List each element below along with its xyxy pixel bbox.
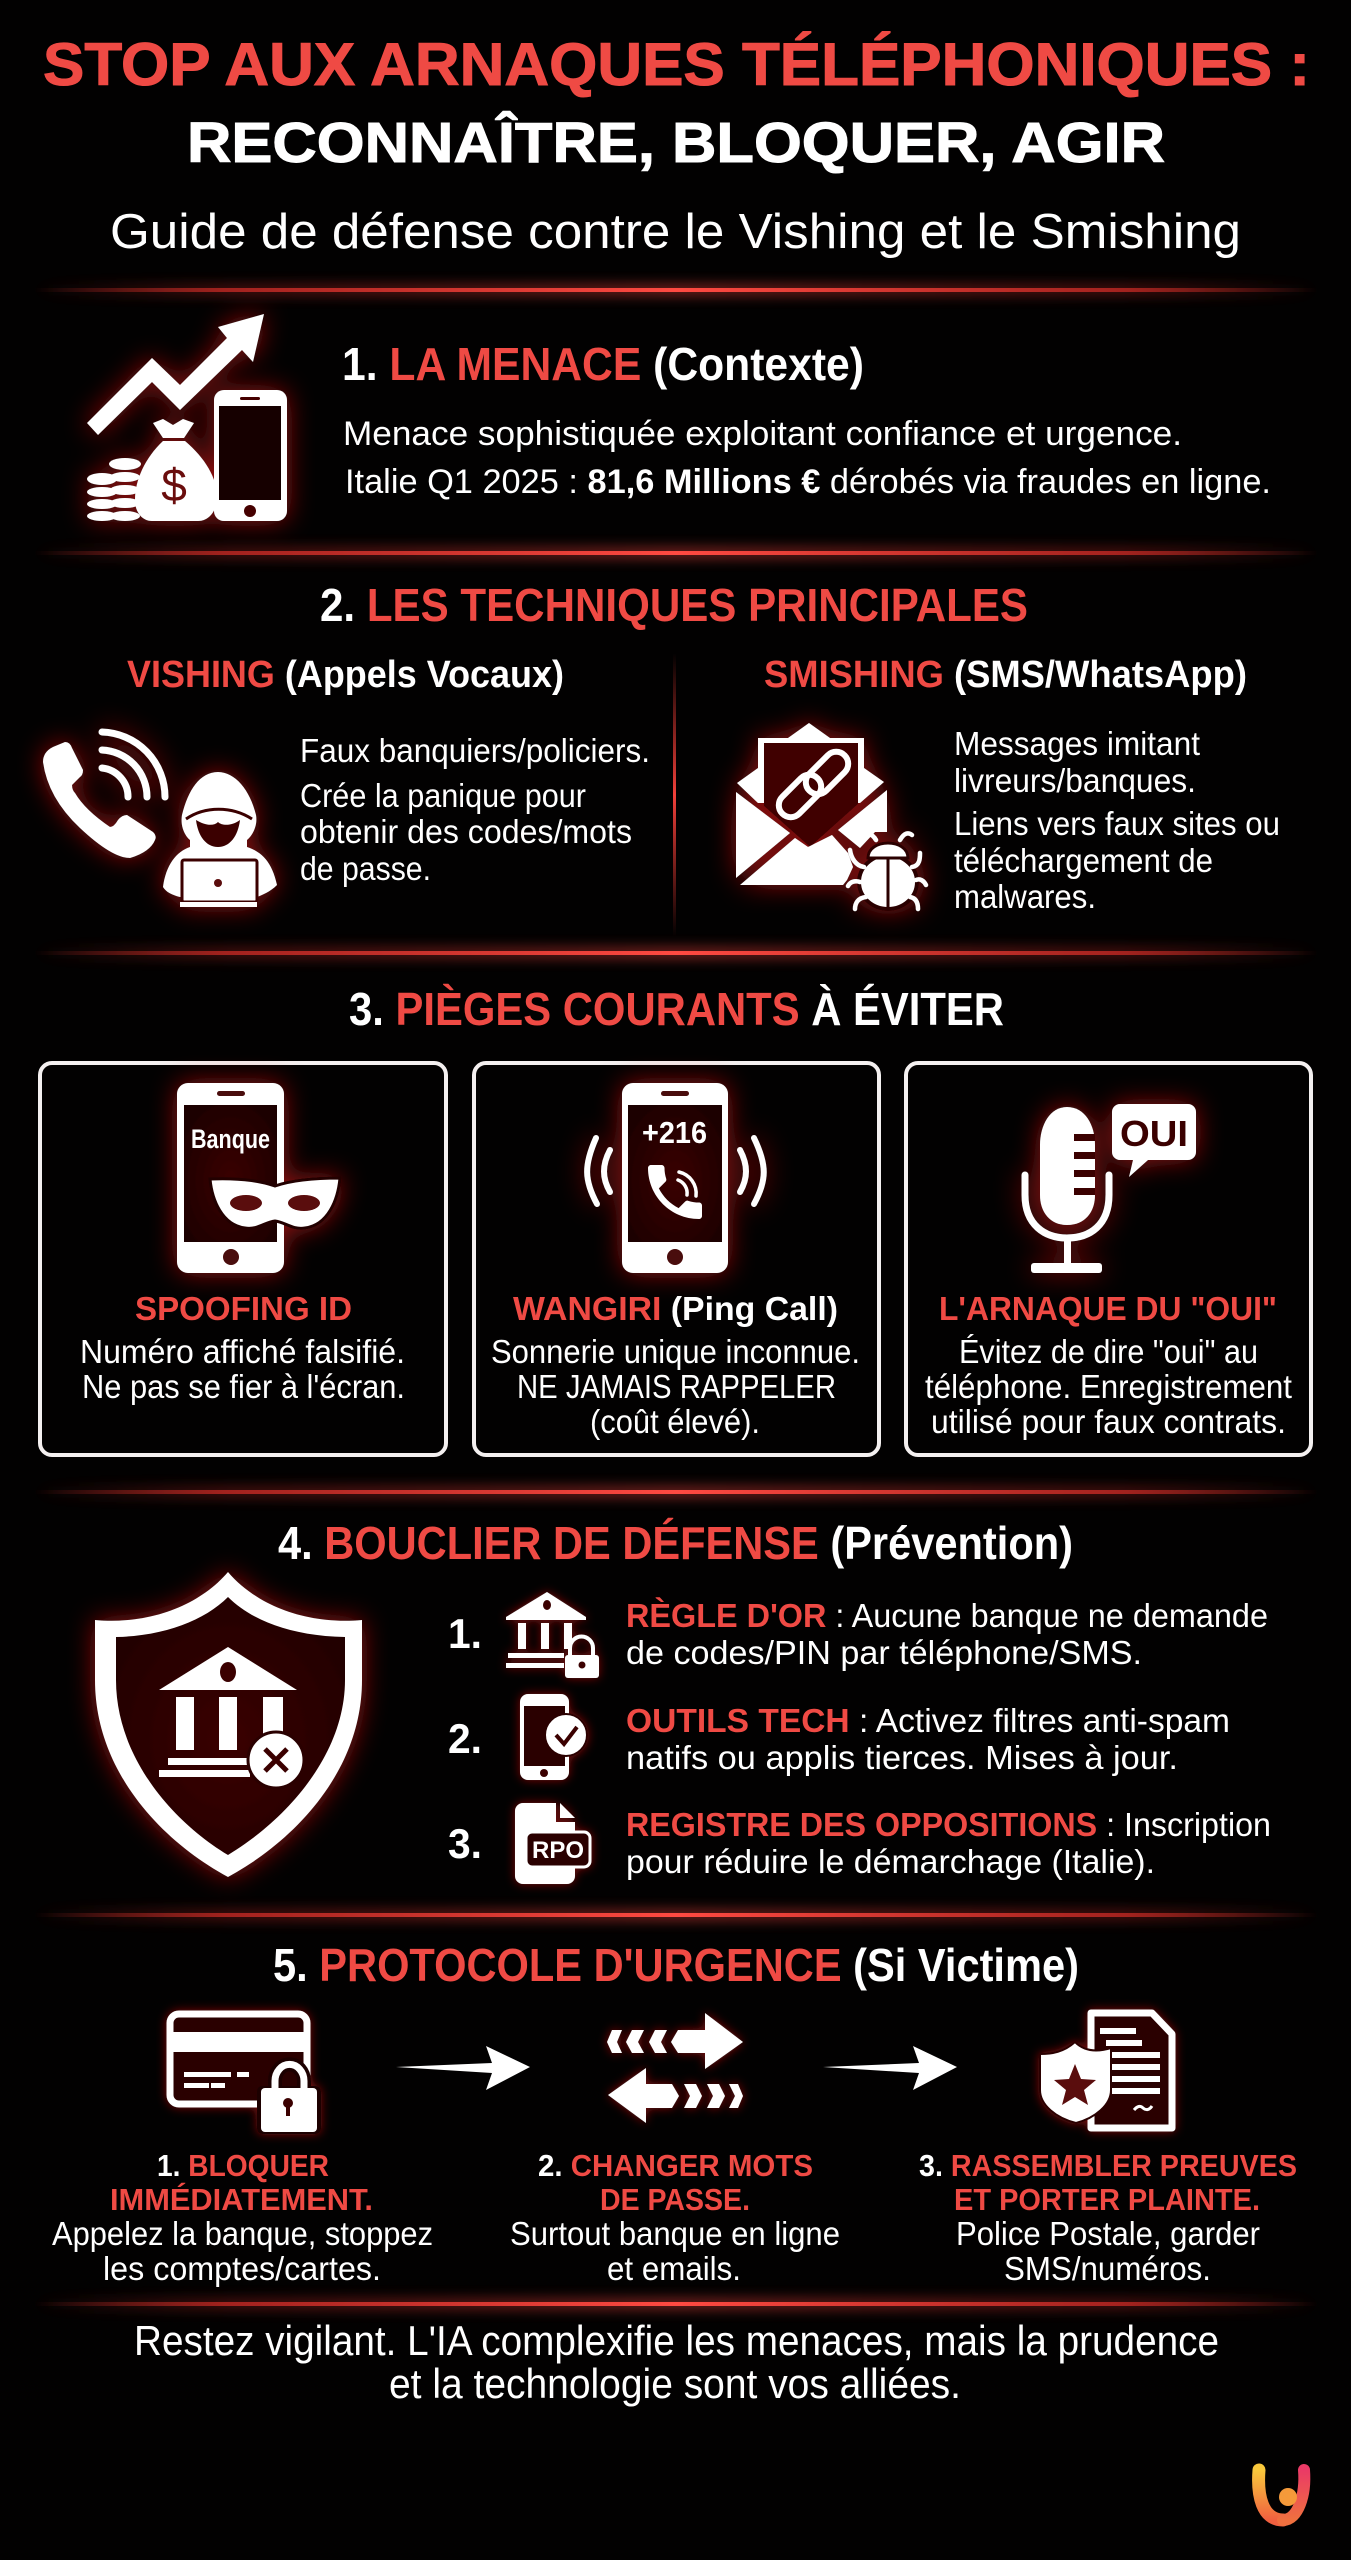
text: règle d'or: RÈGLE D'OR : Aucune banque ne demande <box>626 1597 1268 1634</box>
text: registre: pour réduire le démarchage (Italie). <box>626 1843 1155 1880</box>
icon: microphone with bubble: OUI <box>1120 1113 1188 1154</box>
step 3 text <box>919 2148 1297 2287</box>
arrow: step 2 to 3 <box>823 2046 957 2090</box>
step 1 text: les comptes/cartes. <box>103 2250 381 2287</box>
icon: RPO document: RPO <box>532 1837 584 1864</box>
icon: phone with mask <box>177 1083 340 1273</box>
title: spoofing: SPOOFING ID <box>135 1290 352 1327</box>
text: wangiri: Sonnerie unique inconnue. <box>491 1333 860 1370</box>
panel: techniques <box>43 579 1280 937</box>
text: la menace: Italie Q1 2025 : 81,6 Millions € dérobés via fraudes en ligne. <box>345 463 1271 501</box>
step 2 text: DE PASSE. <box>600 2182 750 2217</box>
text: wangiri <box>491 1333 860 1440</box>
icon: envelope with link and bug <box>736 723 926 909</box>
title: RECONNAÎTRE, BLOQUER, AGIR <box>187 110 1165 175</box>
icon: ringing phone: +216 <box>642 1115 707 1150</box>
text: arnaque du oui: téléphone. Enregistrement <box>925 1368 1292 1405</box>
footer message: et la technologie sont vos alliées. <box>389 2360 961 2407</box>
card: arnaque du oui <box>906 1063 1311 1455</box>
text: la menace <box>343 415 1271 501</box>
icon: bank with lock <box>506 1592 599 1678</box>
step 2 text: et emails. <box>607 2250 741 2287</box>
panel: la menace <box>87 314 1271 521</box>
text: la menace: Menace sophistiquée exploitant confiance et urgence. <box>343 415 1182 453</box>
text: smishing: téléchargement de <box>954 842 1213 879</box>
panel: protocole d'urgence <box>52 1939 1297 2287</box>
list item: registre des oppositions: 3. <box>448 1820 482 1867</box>
heading: protocole: 5. PROTOCOLE D'URGENCE (Si Victime) <box>273 1939 1079 1991</box>
text: registre <box>626 1806 1271 1880</box>
panel: pièges courants <box>40 983 1311 1455</box>
text: smishing <box>954 725 1280 915</box>
text: wangiri: (coût élevé). <box>590 1403 760 1440</box>
text: spoofing: Ne pas se fier à l'écran. <box>82 1368 405 1405</box>
icon: change passwords arrows <box>607 2013 743 2123</box>
title: STOP AUX ARNAQUES TÉLÉPHONIQUES : <box>43 31 1310 98</box>
step 3 text: SMS/numéros. <box>1004 2250 1211 2287</box>
text: smishing: malwares. <box>954 878 1096 915</box>
logo <box>1259 2470 1304 2520</box>
list item: règle d'or: 1. <box>448 1610 482 1657</box>
icon: phone and hacker <box>43 732 277 907</box>
text: vishing: Faux banquiers/policiers. <box>300 732 650 769</box>
subheading: vishing: VISHING (Appels Vocaux) <box>127 654 564 696</box>
step 3 text: 3. RASSEMBLER PREUVES <box>919 2148 1297 2183</box>
text: arnaque du oui: utilisé pour faux contrats. <box>931 1403 1286 1440</box>
text: smishing: livreurs/banques. <box>954 762 1196 799</box>
subheading: smishing: SMISHING (SMS/WhatsApp) <box>764 654 1247 696</box>
icon: ringing phone <box>587 1083 764 1273</box>
footer message <box>134 2317 1219 2407</box>
list item: règle d'or <box>448 1592 1268 1678</box>
heading: bouclier: 4. BOUCLIER DE DÉFENSE (Prévention) <box>278 1517 1073 1569</box>
text: vishing: Crée la panique pour <box>300 777 586 814</box>
text: outils tech <box>626 1702 1230 1776</box>
title: wangiri: WANGIRI (Ping Call) <box>513 1290 838 1327</box>
icon: card with lock <box>170 2014 321 2134</box>
step 1 text <box>52 2148 433 2287</box>
text: règle d'or <box>626 1597 1268 1671</box>
icon: money trend and phone <box>87 314 287 521</box>
subtitle: Guide de défense contre le Vishing et le Smishing <box>110 205 1241 259</box>
icon: phone with check <box>520 1694 587 1780</box>
step 1 text: Appelez la banque, stoppez <box>52 2215 433 2252</box>
icon: shield with bank <box>95 1572 362 1877</box>
text: vishing: obtenir des codes/mots <box>300 813 632 850</box>
step 3 text: Police Postale, garder <box>956 2215 1260 2252</box>
footer message: Restez vigilant. L'IA complexifie les menaces, mais la prudence <box>134 2317 1219 2364</box>
text: wangiri: NE JAMAIS RAPPELER <box>517 1368 836 1405</box>
icon: money trend and phone: $ <box>161 459 187 511</box>
arrow: step 1 to 2 <box>396 2046 530 2090</box>
step 2 text: 2. CHANGER MOTS <box>538 2148 813 2183</box>
list item: outils tech <box>448 1694 1230 1780</box>
panel: bouclier de défense <box>95 1517 1271 1884</box>
icon: phone with mask: Banque <box>191 1124 270 1154</box>
text: arnaque du oui <box>925 1333 1292 1440</box>
text: registre: REGISTRE DES OPPOSITIONS : Inscription <box>626 1806 1271 1843</box>
text: outils tech: natifs ou applis tierces. Mises à jour. <box>626 1739 1178 1776</box>
card: wangiri <box>474 1063 879 1455</box>
step 2 text <box>510 2148 840 2287</box>
icon: police badge and document <box>1040 2013 1172 2128</box>
text: smishing: Liens vers faux sites ou <box>954 805 1280 842</box>
step 1 text: IMMÉDIATEMENT. <box>110 2182 373 2217</box>
step 2 text: Surtout banque en ligne <box>510 2215 840 2252</box>
title <box>43 31 1310 175</box>
card: spoofing <box>40 1063 446 1455</box>
text: arnaque du oui: Évitez de dire "oui" au <box>959 1333 1258 1370</box>
title: arnaque du oui: L'ARNAQUE DU "OUI" <box>939 1290 1277 1327</box>
heading: pièges: 3. PIÈGES COURANTS À ÉVITER <box>349 983 1004 1035</box>
step 3 text: ET PORTER PLAINTE. <box>954 2182 1260 2217</box>
icon: microphone with bubble <box>1025 1104 1196 1273</box>
text: vishing <box>300 732 650 887</box>
text: spoofing: Numéro affiché falsifié. <box>80 1333 405 1370</box>
heading: la menace: 1. LA MENACE (Contexte) <box>342 338 864 390</box>
text: règle d'or: de codes/PIN par téléphone/SMS. <box>626 1634 1142 1671</box>
text: smishing: Messages imitant <box>954 725 1200 762</box>
icon: RPO document <box>515 1803 590 1884</box>
heading: techniques: 2. LES TECHNIQUES PRINCIPALES <box>320 579 1028 631</box>
list item: outils tech: 2. <box>448 1715 482 1762</box>
step 1 text: 1. BLOQUER <box>157 2148 329 2183</box>
list item: registre des oppositions <box>448 1803 1271 1884</box>
text: spoofing <box>80 1333 405 1405</box>
text: outils tech: OUTILS TECH : Activez filtres anti-spam <box>626 1702 1230 1739</box>
text: vishing: de passe. <box>300 850 431 887</box>
